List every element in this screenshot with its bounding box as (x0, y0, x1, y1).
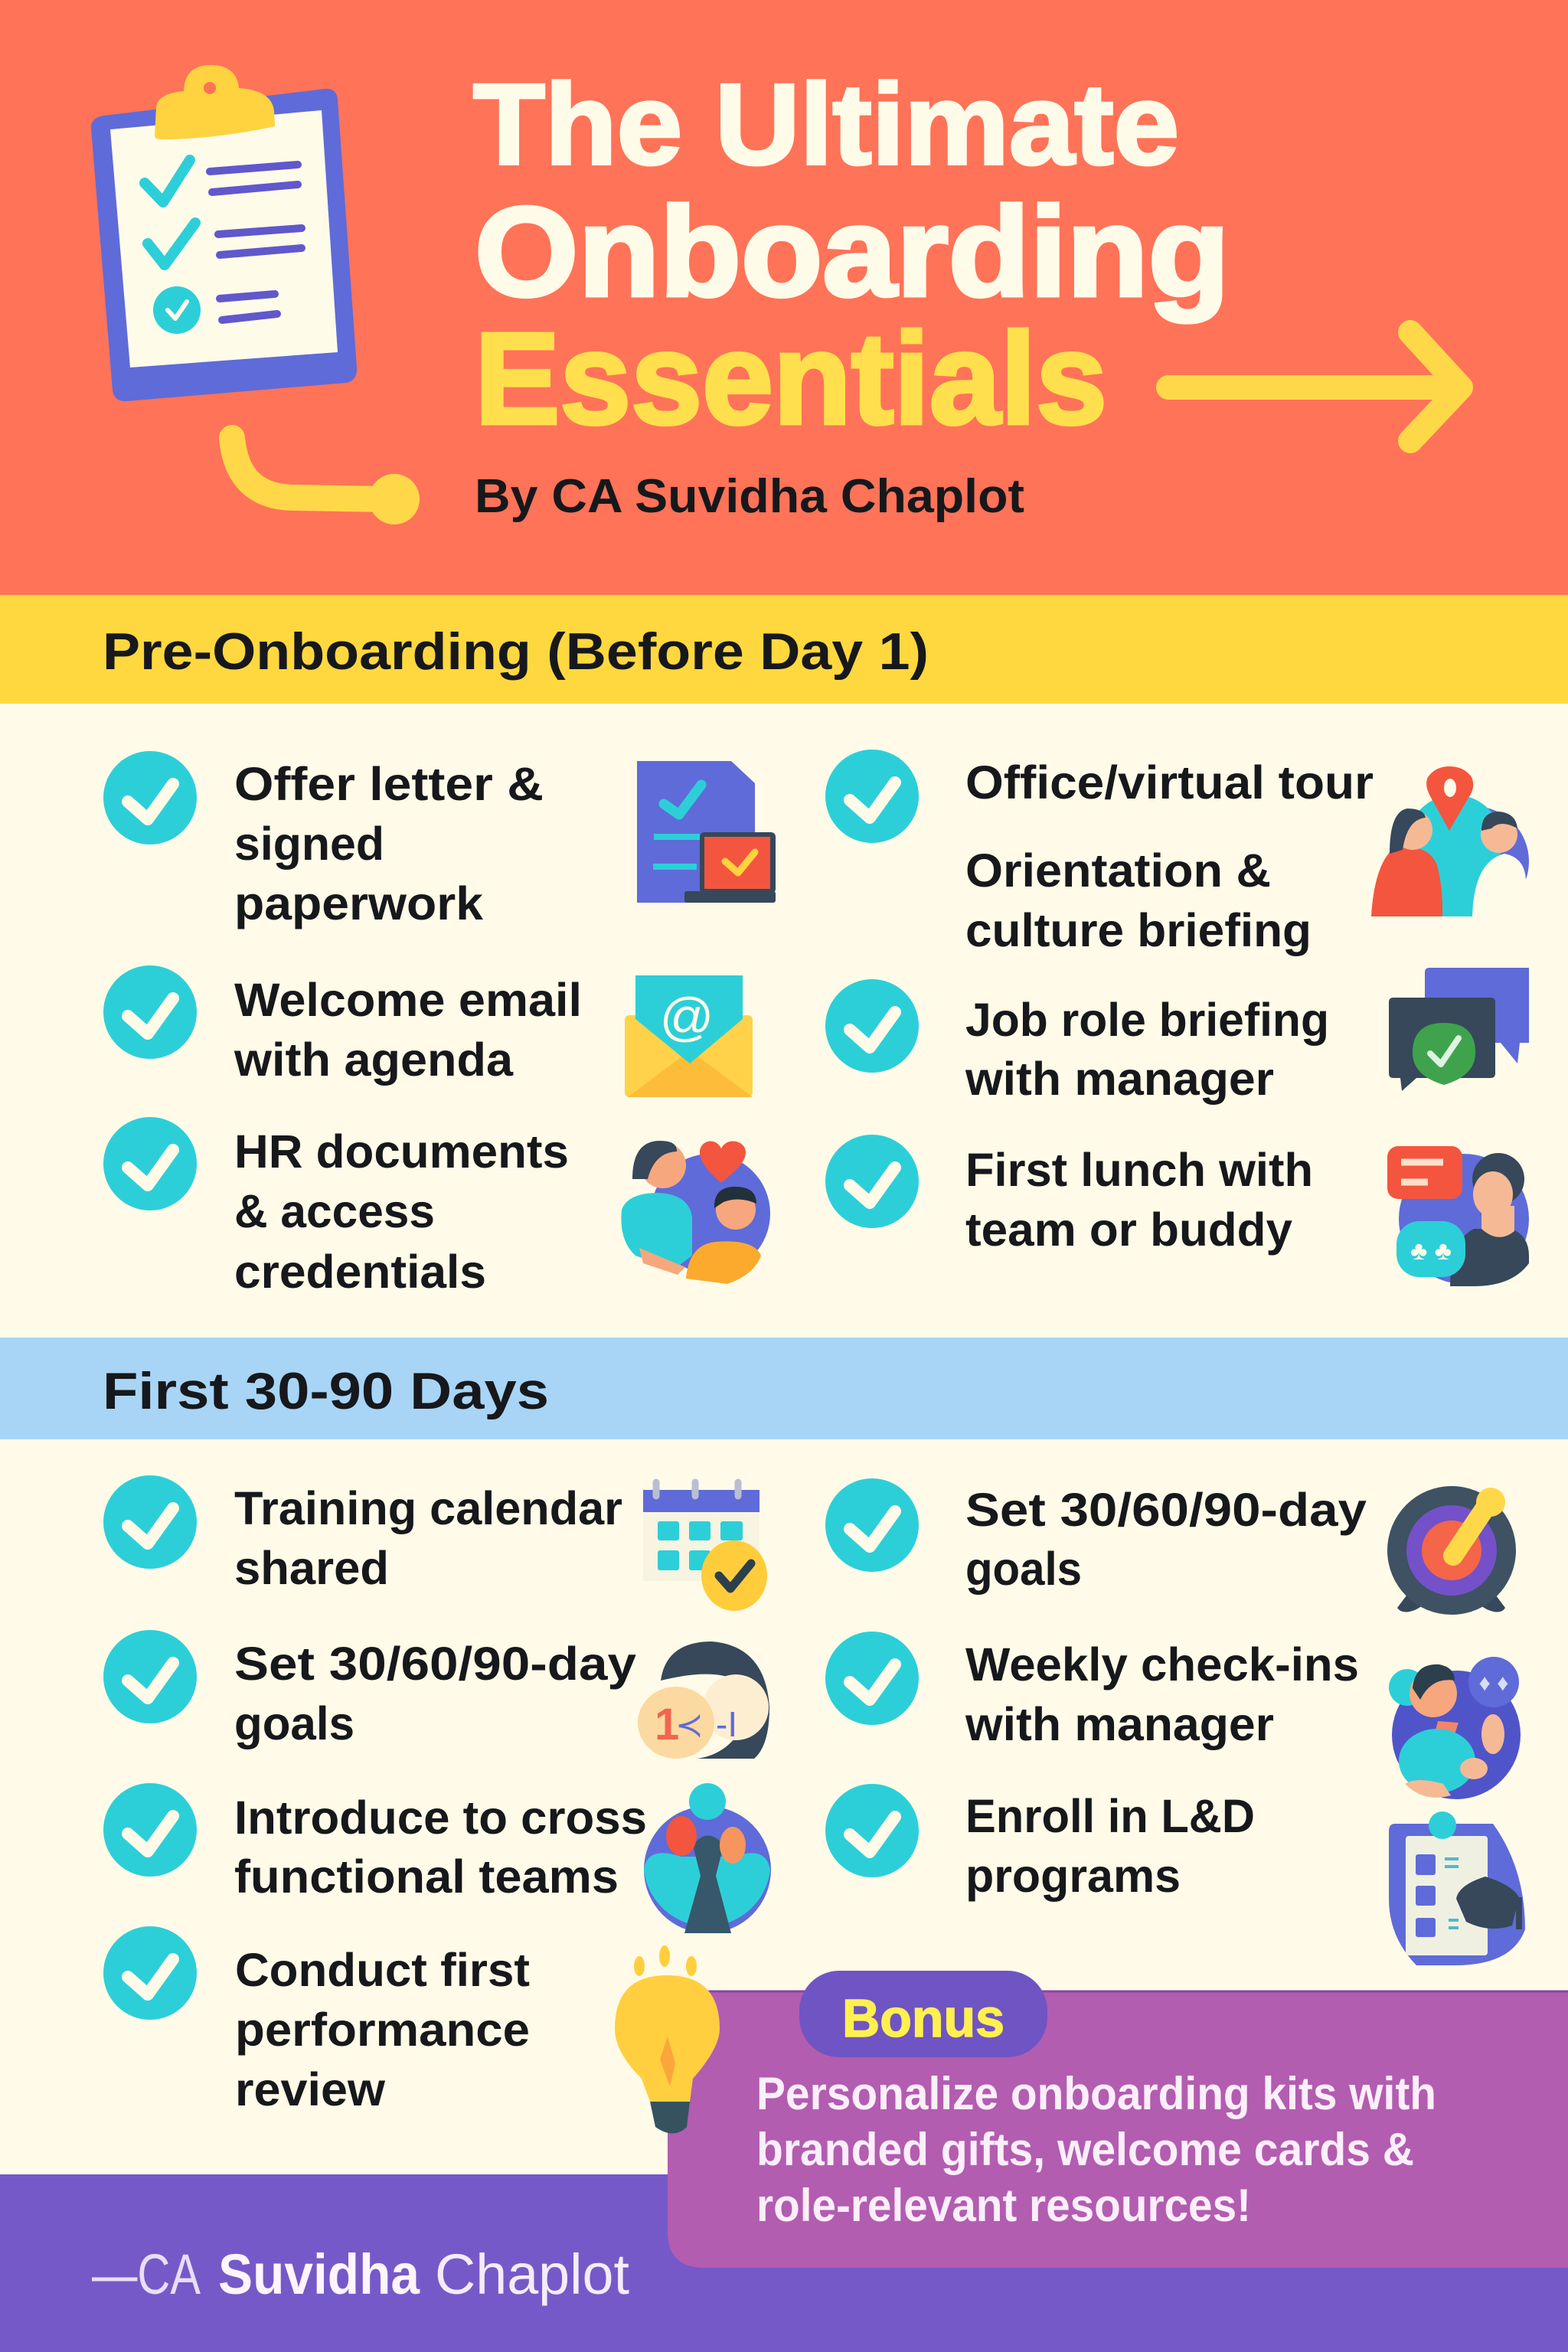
item: office tour and orientation (825, 750, 1374, 956)
item: first performance review: Conduct first (235, 1944, 530, 1996)
item: offer letter: signed (234, 818, 384, 870)
icon: one-on-one bubbles: ≺ (675, 1707, 704, 1744)
icon: one-on-one bubbles (638, 1642, 769, 1759)
section header: first 30-90 days: First 30-90 Days (103, 1362, 549, 1420)
title: Essentials (475, 306, 1107, 452)
panel: first 30-90 days left column (103, 1475, 771, 2115)
header panel (0, 0, 1568, 595)
footer band: Chaplot (435, 2243, 629, 2306)
icon: light bulb (615, 1945, 720, 2133)
bonus pill: Bonus (842, 1988, 1004, 2048)
item: job role briefing: Job role briefing (965, 994, 1329, 1046)
bonus text: role-relevant resources! (756, 2180, 1251, 2231)
item: weekly check-ins (825, 1632, 1359, 1750)
item: training calendar: Training calendar (234, 1482, 622, 1534)
icon: checklist with graduation cap (1389, 1811, 1525, 1965)
icon: calendar with check (643, 1482, 767, 1611)
icon: chat bubbles with shield (1389, 968, 1529, 1091)
panel: first 30-90 days right column (825, 1478, 1525, 1965)
item: offer letter: paperwork (234, 877, 483, 929)
item: HR documents: & access (234, 1185, 435, 1237)
item: cross functional teams (103, 1783, 647, 1903)
item: set goals right (825, 1478, 1367, 1595)
item: training calendar (103, 1475, 622, 1594)
icon: manager check-in: ♦ ♦ (1479, 1671, 1508, 1696)
item: cross functional teams: Introduce to cross (234, 1792, 647, 1844)
item: training calendar: shared (234, 1542, 389, 1594)
item: welcome email (103, 965, 582, 1086)
icon: woman with speech bubbles (1387, 1146, 1529, 1286)
item: weekly check-ins: with manager (965, 1698, 1274, 1750)
bonus text: Personalize onboarding kits with (756, 2068, 1436, 2119)
item: first lunch (825, 1135, 1313, 1256)
footer band (0, 2174, 1568, 2352)
icon: team figures (644, 1783, 771, 1933)
icon: two people with heart (621, 1141, 770, 1284)
callout: bonus (668, 1971, 1568, 2268)
item: weekly check-ins: Weekly check-ins (965, 1638, 1359, 1690)
section header: pre-onboarding (0, 595, 1568, 704)
icon: envelope: @ (659, 987, 714, 1047)
item: office tour and orientation: Orientation & (965, 844, 1271, 897)
byline: By CA Suvidha Chaplot (475, 470, 1024, 523)
panel: pre-onboarding left column (103, 751, 776, 1298)
icon: manager check-in (1389, 1657, 1521, 1799)
title: Onboarding (475, 181, 1230, 323)
item: HR documents: credentials (234, 1246, 486, 1298)
title: The Ultimate (473, 60, 1179, 188)
item: first performance review: performance (235, 2004, 530, 2056)
panel: pre-onboarding right column (825, 750, 1529, 1286)
footer band: —CA (92, 2243, 201, 2306)
item: set goals: Set 30/60/90-day (234, 1638, 636, 1690)
section header: first 30-90 days (0, 1338, 1568, 1439)
item: first lunch: First lunch with (965, 1144, 1313, 1196)
icon: document and laptop (637, 761, 776, 903)
item: set goals (103, 1630, 636, 1749)
icon: yellow hook connector (232, 438, 420, 524)
title (473, 60, 1230, 452)
item: welcome email: with agenda (234, 1034, 514, 1086)
item: office tour and orientation: Office/virtual tour (965, 756, 1374, 808)
bonus text (756, 2068, 1436, 2231)
item: HR documents: HR documents (234, 1125, 569, 1178)
item: set goals: goals (234, 1697, 354, 1749)
item: job role briefing (825, 979, 1329, 1105)
item: offer letter (103, 751, 544, 929)
icon: woman with speech bubbles: ♣ ♣ (1410, 1236, 1452, 1266)
item: first lunch: team or buddy (965, 1204, 1292, 1256)
icon: clipboard with checklist (93, 65, 354, 399)
icon: one-on-one bubbles: -I (716, 1704, 737, 1744)
arrow (1168, 332, 1461, 441)
section header: pre-onboarding: Pre-Onboarding (Before Day 1) (103, 622, 929, 681)
item: set goals right: Set 30/60/90-day (965, 1484, 1367, 1536)
icon: envelope (625, 975, 753, 1097)
item: offer letter: Offer letter & (234, 758, 544, 810)
item: HR documents (103, 1117, 569, 1298)
icon: location pin with people (1371, 766, 1529, 916)
item: first performance review (103, 1926, 530, 2115)
item: enroll in L&D: programs (965, 1850, 1181, 1902)
item: cross functional teams: functional teams (234, 1851, 619, 1903)
item: welcome email: Welcome email (234, 974, 582, 1026)
icon: one-on-one bubbles: 1 (655, 1700, 679, 1749)
item: job role briefing: with manager (965, 1053, 1274, 1105)
item: enroll in L&D (825, 1784, 1255, 1902)
item: set goals right: goals (965, 1543, 1082, 1595)
footer band: Suvidha (218, 2243, 420, 2306)
item: office tour and orientation: culture briefing (965, 904, 1312, 956)
icon: target with dart (1387, 1486, 1516, 1615)
bonus text: branded gifts, welcome cards & (756, 2124, 1414, 2175)
item: enroll in L&D: Enroll in L&D (965, 1790, 1255, 1842)
item: first performance review: review (235, 2063, 386, 2115)
bonus pill (799, 1971, 1047, 2057)
